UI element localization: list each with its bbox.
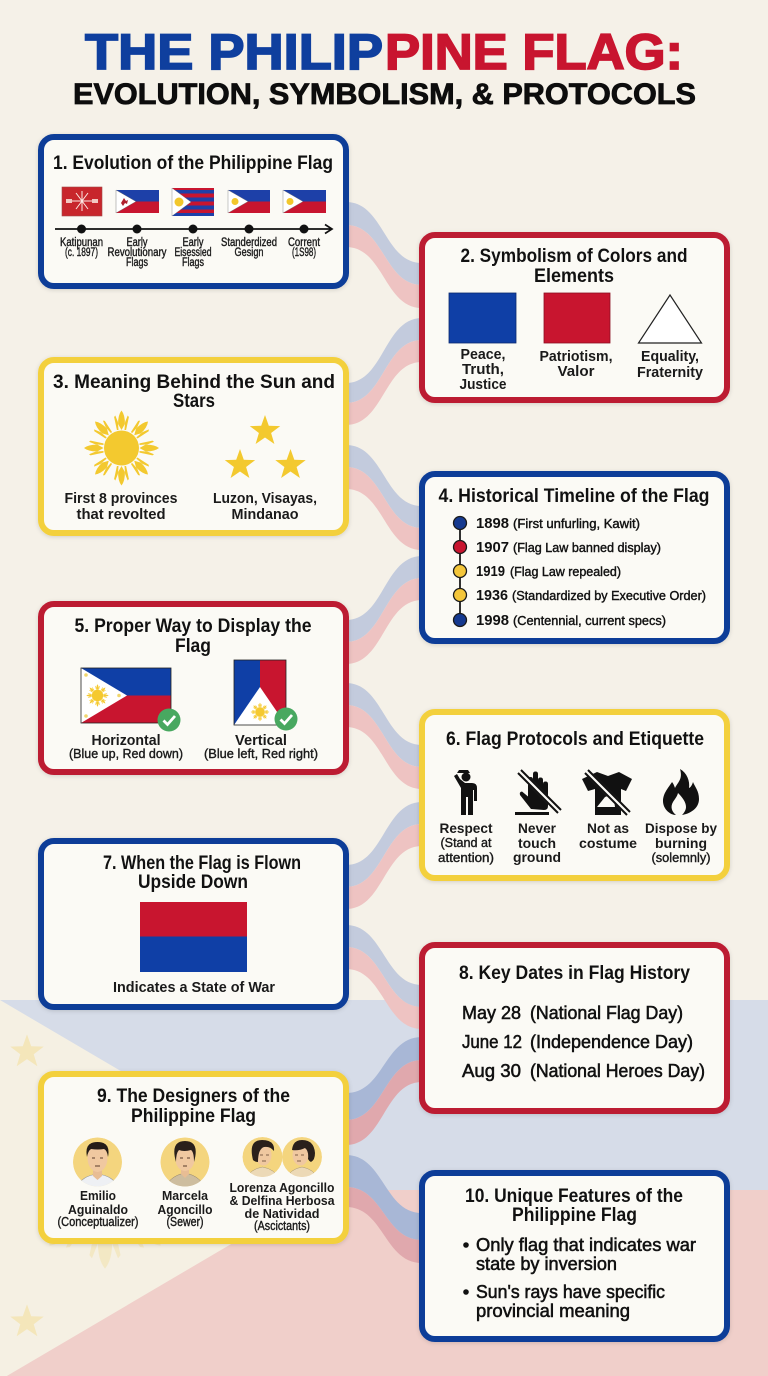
bullet list: provincial meaning xyxy=(476,1301,630,1321)
red swatch xyxy=(544,293,610,343)
icon: flame xyxy=(663,769,699,815)
timeline entries xyxy=(476,515,706,629)
title: PINE FLAG: xyxy=(385,24,683,80)
timeline labels: Flags xyxy=(182,257,204,269)
panel 1: evolution of the flag xyxy=(41,137,346,286)
date list: (Independence Day) xyxy=(530,1032,693,1052)
heading 5: Flag xyxy=(175,635,211,657)
panel 10: unique features xyxy=(422,1173,727,1339)
panel 9: designers xyxy=(41,1074,346,1241)
timeline entries: 1936 xyxy=(476,587,508,604)
sun and star captions: Mindanao xyxy=(232,506,298,523)
heading 4: 4. Historical Timeline of the Flag xyxy=(438,485,710,507)
title: EVOLUTION, SYMBOLISM, & PROTOCOLS xyxy=(73,78,696,111)
color meanings xyxy=(460,346,704,393)
date list xyxy=(462,1003,705,1081)
icon: horizontal flag xyxy=(81,668,171,723)
icon: no touching ground hand xyxy=(515,770,561,815)
icon: early revolutionary flag xyxy=(116,190,159,213)
portrait: Emilio Aguinaldo xyxy=(73,1138,122,1190)
date list: Aug 30 xyxy=(462,1061,521,1081)
heading 7: Upside Down xyxy=(138,871,248,893)
timeline labels: Early xyxy=(126,237,148,249)
timeline entries: 1919 xyxy=(476,563,505,580)
icon: no costume shirt xyxy=(582,770,632,815)
sun and star captions: First 8 provinces xyxy=(64,490,178,507)
icon: saluting figure xyxy=(454,770,477,815)
panel 2: symbolism of colors xyxy=(422,235,727,400)
timeline entries: (Standardized by Executive Order) xyxy=(512,589,706,603)
icon: sun xyxy=(84,410,159,486)
protocol captions: Never xyxy=(518,820,557,836)
panel 6: protocols and etiquette xyxy=(422,712,727,878)
inverted flag xyxy=(140,902,247,972)
heading 9 xyxy=(97,1085,290,1127)
protocol captions: burning xyxy=(655,835,707,851)
designer captions: Emilio xyxy=(80,1188,116,1203)
designer captions: Marcela xyxy=(162,1188,209,1203)
date list: June 12 xyxy=(462,1032,522,1052)
heading 6: 6. Flag Protocols and Etiquette xyxy=(446,728,704,750)
color meanings: Patriotism, xyxy=(540,348,612,365)
date list: May 28 xyxy=(462,1003,521,1023)
protocol captions: Dispose by xyxy=(645,820,717,836)
heading 10 xyxy=(465,1185,683,1226)
heading 2 xyxy=(460,245,688,287)
timeline entries: (Flag Law repealed) xyxy=(510,565,621,579)
timeline labels: (1S98) xyxy=(292,247,316,259)
timeline labels: Revolutionary xyxy=(108,247,167,259)
bullet list: Sun's rays have specific xyxy=(476,1282,665,1302)
timeline line and dots xyxy=(454,516,466,626)
protocol captions: (Stand at xyxy=(440,836,492,850)
timeline labels: (c. 1897) xyxy=(65,247,98,259)
timeline labels: Gesign xyxy=(234,247,264,259)
portrait: Lorenza Agoncillo xyxy=(242,1137,282,1180)
designer captions: & Delfina Herbosa xyxy=(230,1193,335,1208)
sun and star captions: Luzon, Visayas, xyxy=(213,490,317,507)
icon: vertical flag xyxy=(234,660,286,725)
timeline entries: (Flag Law banned display) xyxy=(513,541,661,555)
protocol captions: costume xyxy=(579,835,637,851)
timeline labels: Katipunan xyxy=(60,237,103,249)
timeline entries: 1907 xyxy=(476,539,509,556)
display captions: Horizontal xyxy=(92,732,160,749)
sun and star captions: that revolted xyxy=(76,506,166,523)
display captions: (Blue up, Red down) xyxy=(69,746,183,761)
heading 9: 9. The Designers of the xyxy=(97,1085,290,1107)
connector ribbons between panels xyxy=(346,202,422,1263)
white triangle xyxy=(638,295,702,343)
timeline labels: Corrent xyxy=(288,237,321,249)
timeline entries: 1898 xyxy=(476,515,509,532)
panel 4: historical timeline xyxy=(422,474,727,641)
icon: standardized design flag xyxy=(228,190,270,213)
designer captions: Lorenza Agoncillo xyxy=(230,1180,335,1195)
icon: current flag xyxy=(283,190,326,213)
designer captions: (Ascictants) xyxy=(254,1219,310,1233)
timeline entries: (Centennial, current specs) xyxy=(513,614,666,628)
color meanings: Valor xyxy=(558,363,595,380)
heading 3 xyxy=(53,371,335,412)
display captions: Vertical xyxy=(235,732,287,749)
icon: check mark xyxy=(158,708,180,732)
icon: early flag with stripes xyxy=(172,188,214,216)
heading 2: 2. Symbolism of Colors and xyxy=(460,245,688,267)
timeline axis with arrow xyxy=(55,224,332,234)
heading 7: 7. When the Flag is Flown xyxy=(103,852,301,874)
heading 3: 3. Meaning Behind the Sun and xyxy=(53,371,335,393)
panel 3: sun and stars xyxy=(41,360,346,533)
title: THE PHILIP xyxy=(85,24,383,80)
heading 8: 8. Key Dates in Flag History xyxy=(459,962,690,984)
color meanings: Peace, xyxy=(460,346,506,363)
bullet list: Only flag that indicates war xyxy=(476,1235,696,1255)
panel 7: flag upside down xyxy=(41,841,346,1007)
panel 8: key dates xyxy=(422,945,727,1111)
bullet list: state by inversion xyxy=(476,1254,617,1274)
protocol captions: (solemnly) xyxy=(652,851,710,865)
designer captions: (Conceptualizer) xyxy=(58,1215,138,1229)
bullet list xyxy=(463,1235,696,1321)
heading 10: Philippine Flag xyxy=(512,1204,637,1226)
heading 2: Elements xyxy=(534,265,614,287)
heading 3: Stars xyxy=(173,390,215,412)
sun and star captions xyxy=(64,490,317,523)
heading 5 xyxy=(74,615,312,657)
timeline labels: Standerdized xyxy=(221,237,277,249)
heading 7 xyxy=(103,852,301,893)
color meanings: Justice xyxy=(460,376,506,393)
timeline labels: Flags xyxy=(126,257,148,269)
blue swatch xyxy=(449,293,516,343)
protocol captions: touch xyxy=(518,835,556,851)
panel 5: proper display xyxy=(41,604,346,772)
display captions: (Blue left, Red right) xyxy=(204,746,318,761)
date list: (National Flag Day) xyxy=(530,1003,683,1023)
icon: check mark xyxy=(274,708,298,730)
caption 7: Indicates a State of War xyxy=(113,979,275,996)
timeline labels: Early xyxy=(182,237,204,249)
timeline labels: Eisessied xyxy=(174,247,212,259)
timeline labels xyxy=(60,237,321,269)
icon: Katipunan flag xyxy=(62,187,102,216)
designer captions: de Natividad xyxy=(244,1206,320,1221)
protocol captions: ground xyxy=(513,849,561,865)
heading 5: 5. Proper Way to Display the xyxy=(74,615,312,637)
icon: three stars xyxy=(225,415,306,478)
timeline entries: 1998 xyxy=(476,612,509,629)
portrait: Marcela Agoncillo xyxy=(160,1138,210,1190)
color meanings: Equality, xyxy=(641,348,699,365)
heading 1: 1. Evolution of the Philippine Flag xyxy=(53,152,333,174)
timeline entries: (First unfurling, Kawit) xyxy=(513,517,640,531)
color meanings: Fraternity xyxy=(637,364,704,381)
designer captions xyxy=(58,1180,335,1233)
heading 10: 10. Unique Features of the xyxy=(465,1185,683,1207)
title xyxy=(73,24,696,111)
designer captions: Agoncillo xyxy=(158,1202,213,1217)
designer captions: Aguinaldo xyxy=(68,1202,128,1217)
protocol captions: Not as xyxy=(587,820,629,836)
protocol captions: Respect xyxy=(440,820,493,836)
portrait: Delfina Herbosa xyxy=(282,1137,322,1180)
protocol captions xyxy=(438,820,717,865)
heading 9: Philippine Flag xyxy=(131,1105,256,1127)
display captions xyxy=(69,732,318,761)
date list: (National Heroes Day) xyxy=(530,1061,705,1081)
color meanings: Truth, xyxy=(462,361,504,378)
protocol captions: attention) xyxy=(438,851,494,865)
designer captions: (Sewer) xyxy=(166,1215,204,1229)
